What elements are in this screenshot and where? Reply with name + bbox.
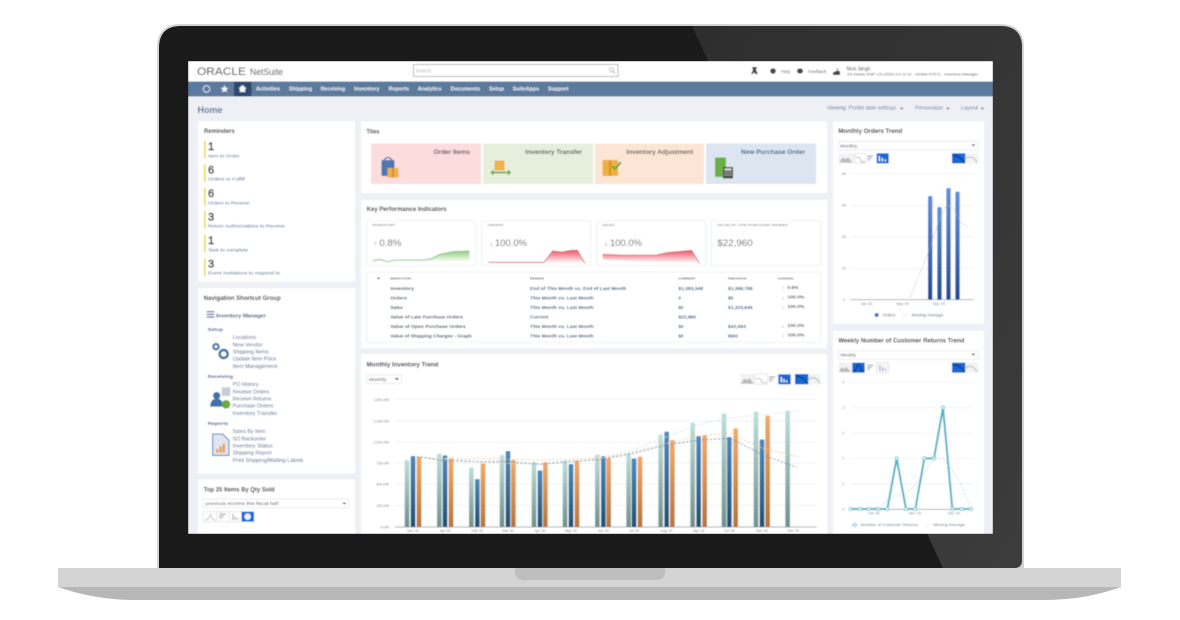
- tile: new purchase order: New Purchase Order: [741, 149, 805, 156]
- bar chart: Nov '20: [756, 529, 768, 533]
- panel: top 25 items: [198, 479, 355, 534]
- reminder list: 1: [208, 141, 214, 153]
- kpi card: orders: 100.0%: [495, 238, 527, 248]
- kpi card: inventory: ↑: [373, 239, 377, 248]
- icon: clipboard and box: [382, 158, 398, 178]
- indicator table: $502: [728, 333, 738, 338]
- bar chart: May '20: [896, 302, 909, 306]
- indicator table: $1,323,645: [728, 305, 753, 310]
- nav labels: Shipping: [289, 86, 312, 92]
- kpi card: value of late purchase orders: $22,960: [717, 238, 753, 248]
- period select: Weekly: [840, 353, 857, 359]
- kpi card: orders: ORDERS: [487, 223, 503, 227]
- legend: [852, 523, 965, 527]
- receiving section: Receiving: [208, 374, 233, 380]
- indicator table: CHANGE: [778, 276, 794, 280]
- page title: Home: [198, 105, 223, 115]
- nav labels: Inventory: [354, 86, 380, 92]
- bar chart: 80: [842, 172, 846, 176]
- legend: Moving Average: [912, 312, 944, 317]
- indicator table: ↓: [782, 333, 785, 339]
- nav labels: Support: [548, 86, 569, 92]
- line chart: 2: [842, 432, 844, 436]
- bar chart: Mar '20: [502, 529, 514, 533]
- period select: [367, 375, 402, 384]
- indicator table: $1,383,348: [678, 286, 704, 291]
- tile: new purchase order: [706, 144, 816, 184]
- indicator table: This Month vs. Last Month: [530, 295, 594, 300]
- logo: ORACLE: [197, 66, 246, 78]
- indicator table: Current: [530, 314, 549, 319]
- icon: report document: [213, 434, 229, 455]
- icon: boxes with arrows: [490, 160, 511, 176]
- bar chart: 0.00K: [380, 525, 390, 529]
- inventory manager link: [207, 312, 266, 319]
- indicator table: 100.0%: [787, 295, 804, 300]
- indicator table: 100.0%: [787, 332, 804, 337]
- reminder list: 1: [208, 235, 214, 247]
- tile: inventory adjustment: Inventory Adjustment: [626, 149, 694, 156]
- line chart: Nov '20: [909, 512, 921, 516]
- nav labels: Setup: [489, 86, 505, 92]
- line chart: 2: [842, 406, 844, 410]
- panel: key performance indicators: [361, 200, 827, 348]
- receiving section: [208, 374, 278, 417]
- user tools: Nick Singh: [846, 66, 871, 72]
- tile: inventory transfer: Inventory Transfer: [525, 149, 582, 156]
- setup section: Locations: [233, 335, 256, 341]
- reminder list: 3: [208, 258, 214, 270]
- indicator table: ↓: [782, 295, 785, 301]
- chart type buttons: [740, 374, 821, 384]
- bar chart: May '20: [565, 529, 577, 533]
- indicator table: ↓: [782, 324, 785, 330]
- reminder list: Orders to Fulfill: [208, 177, 245, 183]
- indicator table: Sales: [390, 305, 403, 310]
- indicator table: $42,593: [728, 324, 747, 329]
- bar chart: Sep '20: [933, 302, 945, 306]
- legend: Orders: [883, 312, 895, 317]
- indicator table: This Month vs. Last Month: [530, 333, 594, 338]
- receiving section: Inventory Transfer: [233, 411, 278, 417]
- series: blue bars: [411, 432, 764, 527]
- bar chart: 60: [842, 204, 846, 208]
- nav labels: Activities: [256, 86, 280, 92]
- indicator table: $0: [678, 333, 684, 338]
- reports section: Reports: [208, 421, 229, 427]
- reports section: SO Backorder: [233, 436, 266, 442]
- legend: [875, 312, 944, 317]
- sparkline: [603, 250, 699, 263]
- indicator table: Value of Shipping Charges - Graph: [390, 333, 472, 338]
- kpi card: inventory: INVENTORY: [372, 223, 396, 227]
- bar chart: 250.00K: [376, 504, 390, 508]
- indicator table: PERIOD: [530, 276, 544, 280]
- navigation bar: [188, 82, 993, 96]
- heading: Monthly Orders Trend: [838, 128, 902, 135]
- period select: Monthly: [369, 377, 387, 383]
- line chart: 0: [842, 508, 844, 512]
- sparkline: [373, 251, 469, 262]
- reports section: Sales By Item: [233, 429, 265, 435]
- reports section: Print Shipping/Mailing Labels: [233, 458, 304, 464]
- setup section: Item Management: [233, 364, 278, 370]
- bar chart: Jun '20: [598, 529, 609, 533]
- user tools: [751, 66, 979, 76]
- indicator table: $22,960: [678, 314, 697, 319]
- indicator table: Value of Open Purchase Orders: [390, 324, 466, 329]
- indicator table: $9: [728, 295, 733, 300]
- kpi card: value of late purchase orders: [711, 221, 821, 266]
- period select: [838, 351, 978, 359]
- nav labels: Reports: [389, 86, 409, 92]
- setup section: Shipping Items: [233, 350, 269, 356]
- icon: box and check: [602, 160, 621, 176]
- period select: previous months this fiscal half: [206, 501, 279, 507]
- panel: tiles: [361, 122, 827, 193]
- setup section: Setup: [208, 327, 223, 333]
- indicator table: $1,369,788: [728, 286, 753, 291]
- logo: [197, 66, 283, 78]
- nav labels: Receiving: [321, 86, 345, 92]
- icon: document and calculator: [715, 158, 733, 178]
- indicator table: Value of Late Purchase Orders: [390, 314, 464, 319]
- indicator table: This Month vs. Last Month: [530, 324, 594, 329]
- nav labels: SuiteApps: [513, 86, 539, 92]
- bar chart: Jul '20: [629, 529, 639, 533]
- indicator table: INDICATOR: [390, 276, 411, 280]
- heading: Top 25 Items By Qty Sold: [204, 486, 275, 493]
- legend: Moving Average: [933, 523, 965, 527]
- reports section: Inventory Status: [233, 443, 273, 449]
- bar chart: Jan '20: [861, 302, 873, 306]
- bar chart: Oct '20: [724, 529, 735, 533]
- panel: monthly inventory trend: [361, 354, 827, 534]
- reminder list: 6: [208, 164, 214, 176]
- indicator table: 100.0%: [787, 323, 804, 328]
- dashboard screen: [188, 61, 993, 534]
- indicator table: Orders: [390, 295, 408, 300]
- indicator table: End of This Month vs. End of Last Month: [530, 286, 627, 291]
- nav labels: Analytics: [418, 86, 442, 92]
- bar chart: Apr '20: [535, 529, 546, 533]
- panel: reminders: [198, 121, 355, 282]
- receiving section: PO History: [233, 382, 259, 388]
- heading: Reminders: [204, 128, 235, 135]
- reminder list: 3: [208, 211, 214, 223]
- reminder list: [204, 141, 285, 277]
- bar chart: [373, 398, 817, 533]
- indicator table: 0.8%: [787, 285, 799, 290]
- laptop base: [58, 568, 1121, 600]
- icon: gears: [213, 344, 228, 358]
- bar chart: 1,000.00K: [373, 441, 390, 445]
- bar chart: 1,500.00K: [373, 398, 390, 402]
- reminder list: Orders to Receive: [208, 200, 250, 206]
- line chart: Oct '20: [868, 512, 880, 516]
- setup section: Update Item Price: [233, 357, 276, 363]
- icon: people and returns: [210, 387, 230, 409]
- indicator table: CURRENT: [678, 276, 696, 280]
- bar chart: 750.00K: [376, 462, 390, 466]
- bar chart: Dec '19: [407, 529, 419, 533]
- period select: [203, 499, 349, 508]
- page options: Viewing: Portlet date settings: [827, 106, 896, 112]
- tile: inventory adjustment: [595, 144, 704, 184]
- receiving section: Purchase Orders: [233, 404, 274, 410]
- indicator table: ↓: [782, 305, 785, 311]
- chart type buttons: [838, 153, 978, 163]
- reports section: Shipping Report: [233, 451, 272, 457]
- bar chart: 0: [843, 298, 845, 302]
- chart type buttons: [203, 512, 254, 522]
- legend: Number of Customer Returns: [861, 523, 918, 527]
- bar chart: Dec '20: [787, 529, 799, 533]
- search box: Search: [416, 68, 432, 74]
- panel: monthly orders trend: [833, 121, 984, 324]
- indicator table: $0: [678, 324, 684, 329]
- line chart: 3: [842, 381, 844, 385]
- series: teal bars: [405, 411, 790, 527]
- receiving section: Receive Orders: [233, 389, 270, 395]
- bar chart: Aug '20: [661, 529, 673, 533]
- bar chart: 1,250.00K: [373, 420, 390, 424]
- kpi card: orders: ↓: [489, 239, 493, 248]
- series: orange bars: [417, 416, 770, 527]
- indicator table: [367, 272, 821, 342]
- user tools: Feedback: [808, 69, 827, 74]
- bar chart: 40: [842, 235, 846, 239]
- bar chart: Feb '20: [472, 529, 483, 533]
- tile: inventory transfer: [483, 144, 593, 184]
- kpi card: sales: [597, 221, 706, 266]
- page options: [827, 106, 984, 112]
- bar chart: 500.00K: [376, 483, 390, 487]
- user tools: SS Starter ENP US v2020.2.0 11:11 - NOAM STR E - Inventory Manager: [847, 72, 979, 76]
- period select: Monthly: [840, 143, 858, 149]
- line chart: Dec '20: [948, 512, 960, 516]
- indicator table: This Month vs. Last Month: [530, 305, 594, 310]
- reminder list: Item to Order: [208, 153, 240, 159]
- heading: Key Performance Indicators: [367, 206, 447, 213]
- header bar: [188, 61, 993, 82]
- nav icons: [203, 85, 246, 92]
- line chart: 1: [842, 457, 844, 461]
- page options: Layout: [961, 106, 979, 112]
- kpi card: orders: [482, 221, 591, 266]
- moving average lines: [417, 411, 798, 467]
- bar chart: Jan '20: [439, 529, 451, 533]
- bar chart: Sep '20: [693, 529, 705, 533]
- kpi card: inventory: [367, 221, 476, 266]
- heading: Weekly Number of Customer Returns Trend: [838, 337, 964, 344]
- panel: navigation shortcut group: [198, 288, 355, 473]
- laptop lid: [157, 24, 1024, 568]
- nav labels: [256, 86, 569, 92]
- reminder list: Task to complete: [208, 247, 248, 253]
- indicator table: PREVIOUS: [728, 276, 746, 280]
- search box: [414, 64, 618, 76]
- heading: Tiles: [366, 128, 380, 136]
- heading: Monthly Inventory Trend: [367, 361, 438, 368]
- indicator table: 0: [678, 295, 681, 300]
- indicator table: $0: [678, 305, 684, 310]
- nav labels: Documents: [451, 86, 480, 92]
- kpi card: value of late purchase orders: VALUE OF LATE PURCHASE ORDERS: [717, 223, 788, 227]
- line chart: 1: [842, 482, 844, 486]
- line chart: [842, 381, 973, 516]
- setup section: New Vendor: [233, 342, 263, 348]
- reminder list: Event Invitations to respond to: [208, 271, 280, 277]
- kpi card: inventory: 0.8%: [379, 238, 401, 248]
- reminder list: Return Authorizations to Receive: [208, 224, 285, 230]
- kpi card: sales: 100.0%: [610, 238, 642, 248]
- reports section: [208, 421, 304, 464]
- kpi card: sales: SALES: [602, 223, 614, 227]
- inventory manager link: Inventory Manager: [216, 313, 266, 319]
- logo: NetSuite: [250, 67, 283, 78]
- heading: Navigation Shortcut Group: [204, 295, 281, 302]
- bar chart: [842, 172, 973, 306]
- bar chart: 20: [842, 267, 846, 271]
- kpi card: sales: ↓: [604, 239, 608, 248]
- sparkline: [488, 250, 585, 263]
- tile: order items: Order Items: [434, 149, 470, 156]
- setup section: [208, 327, 278, 370]
- user tools: Help: [781, 69, 791, 74]
- tile: order items: [371, 144, 481, 184]
- indicator table: ↑: [782, 286, 785, 292]
- panel: weekly number of customer returns trend: [833, 331, 984, 534]
- period select: [838, 141, 978, 150]
- indicator table: 100.0%: [787, 304, 804, 309]
- chart type buttons: [838, 363, 978, 373]
- page options: Personalize: [915, 106, 943, 112]
- receiving section: Receive Returns: [233, 396, 272, 402]
- reminder list: 6: [208, 188, 214, 200]
- indicator table: Inventory: [390, 286, 415, 291]
